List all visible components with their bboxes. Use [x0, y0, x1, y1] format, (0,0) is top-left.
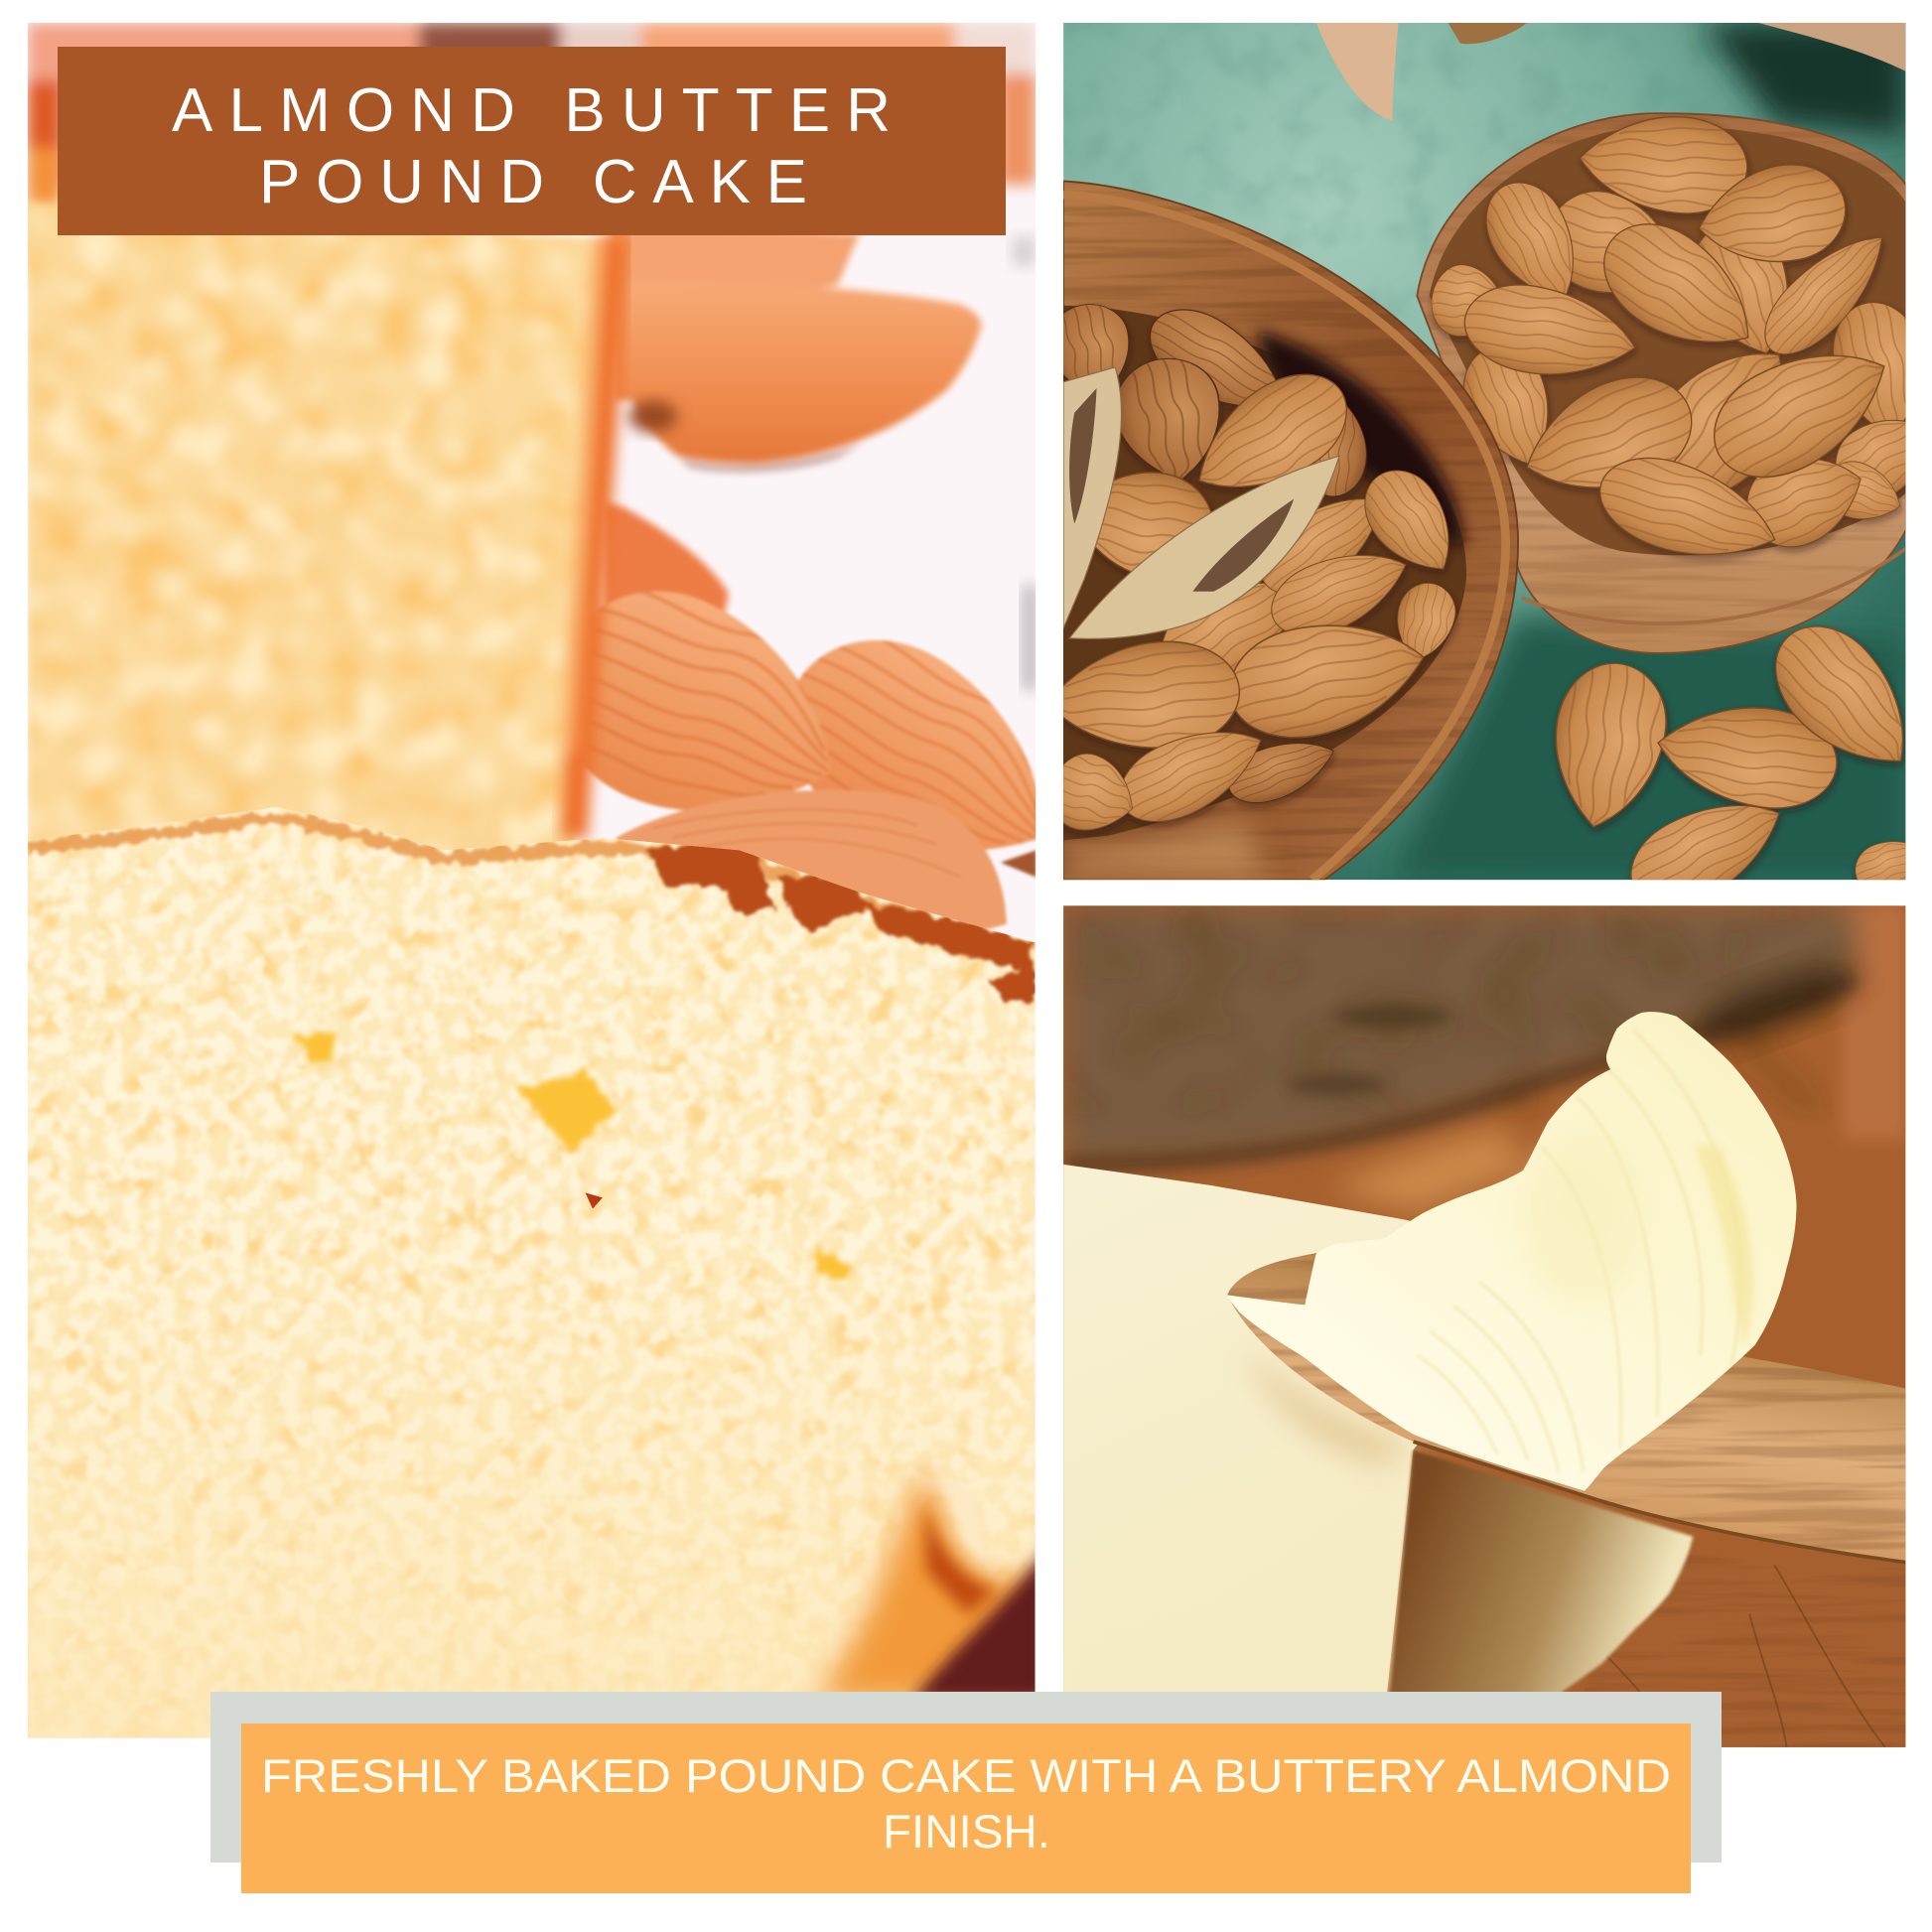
grey caption backing — [210, 1692, 1722, 1863]
wood grain lines — [1601, 1565, 1885, 1747]
wooden spoon top right — [1756, 22, 1906, 71]
grey object at right edge — [1023, 586, 1036, 690]
right bowl — [1417, 110, 1932, 659]
butter curl yellow fold — [1695, 1146, 1753, 1349]
burlap dark folds — [1288, 1006, 1451, 1095]
wooden spatula — [1220, 1245, 1906, 1571]
left bowl wood grain — [1063, 181, 1522, 880]
soft focus lower cake — [28, 1359, 1035, 1738]
blurred top background — [27, 22, 1036, 265]
pale almond husk vertical — [1063, 367, 1122, 628]
title text: ALMOND BUTTER — [172, 76, 891, 145]
back cake slice — [28, 201, 610, 850]
butter block side face — [1385, 1450, 1693, 1747]
orange caption box — [241, 1724, 1691, 1893]
spatula grain — [1220, 1245, 1906, 1571]
caption text: FRESHLY BAKED POUND CAKE WITH A BUTTERY ALMOND — [261, 1749, 1671, 1802]
baked crust along top — [27, 817, 1035, 952]
dark hollow of blurred almond — [628, 400, 678, 433]
wood table front — [1578, 1550, 1906, 1749]
panel: almonds in wooden bowls photo — [1040, 22, 1932, 923]
burnt crust corner — [813, 1466, 1047, 1701]
caption text: FINISH. — [883, 1805, 1050, 1858]
almonds in left bowl — [1040, 292, 1472, 845]
dark shadow right of burlap — [1685, 951, 1863, 1057]
burlap blurred background — [1063, 905, 1855, 1165]
back cake crust edge — [567, 234, 617, 838]
shadow lower table — [1392, 617, 1906, 880]
title banner — [58, 47, 1006, 235]
butter block top — [1063, 1165, 1453, 1747]
crumb speck — [586, 1192, 603, 1209]
lit lower bowl wall — [1063, 819, 1269, 880]
loose almonds on table — [1540, 605, 1932, 923]
right bowl body — [1417, 113, 1906, 653]
burlap dark lower edge — [1063, 980, 1855, 1165]
grey patch top right — [1013, 236, 1035, 266]
wood table background — [1063, 905, 1906, 1748]
yellow crumb holes — [296, 1033, 857, 1282]
blurred almonds behind cake — [604, 221, 981, 632]
green table — [1063, 22, 1906, 881]
wood table grain — [1578, 1555, 1906, 1747]
small almond top — [1448, 22, 1528, 44]
caption text — [261, 1749, 1671, 1858]
butter curl ridges — [1417, 1029, 1740, 1472]
left bowl body — [1063, 181, 1518, 880]
spatula shadow on block — [1245, 1349, 1414, 1466]
front cake slice — [27, 788, 1047, 1738]
right bowl interior — [1430, 126, 1906, 555]
panel: pound cake photo — [27, 22, 1094, 1739]
title text: POUND CAKE — [259, 148, 807, 216]
butter curl — [1227, 1012, 1797, 1491]
title text — [172, 76, 891, 216]
dark table shadow top right — [1701, 22, 1906, 136]
left bowl interior — [1063, 306, 1466, 840]
right bowl lower band — [1522, 548, 1906, 623]
butter curl pale shading — [1522, 1134, 1645, 1307]
panel: butter on wooden spatula photo — [1063, 905, 1906, 1749]
almonds in right bowl — [1426, 110, 1932, 581]
dark crust patches — [648, 838, 1035, 1004]
loose almond shard top — [1315, 22, 1399, 121]
spatula lower shadow edge — [1414, 1442, 1906, 1563]
pale almond husk diagonal — [1069, 456, 1339, 638]
warm wood glow — [1330, 1128, 1528, 1213]
brown right edge blur — [1842, 905, 1906, 1140]
burlap texture — [1063, 905, 1828, 1115]
sharp almonds at cake edge — [582, 590, 1036, 930]
left bowl rim light — [1063, 195, 1506, 880]
right bowl wood grain — [1417, 111, 1906, 659]
left bowl inner shadow — [1257, 331, 1463, 548]
butter block front face shading — [1063, 1450, 1414, 1747]
table mottling — [1063, 22, 1906, 392]
left bowl — [1040, 181, 1522, 880]
